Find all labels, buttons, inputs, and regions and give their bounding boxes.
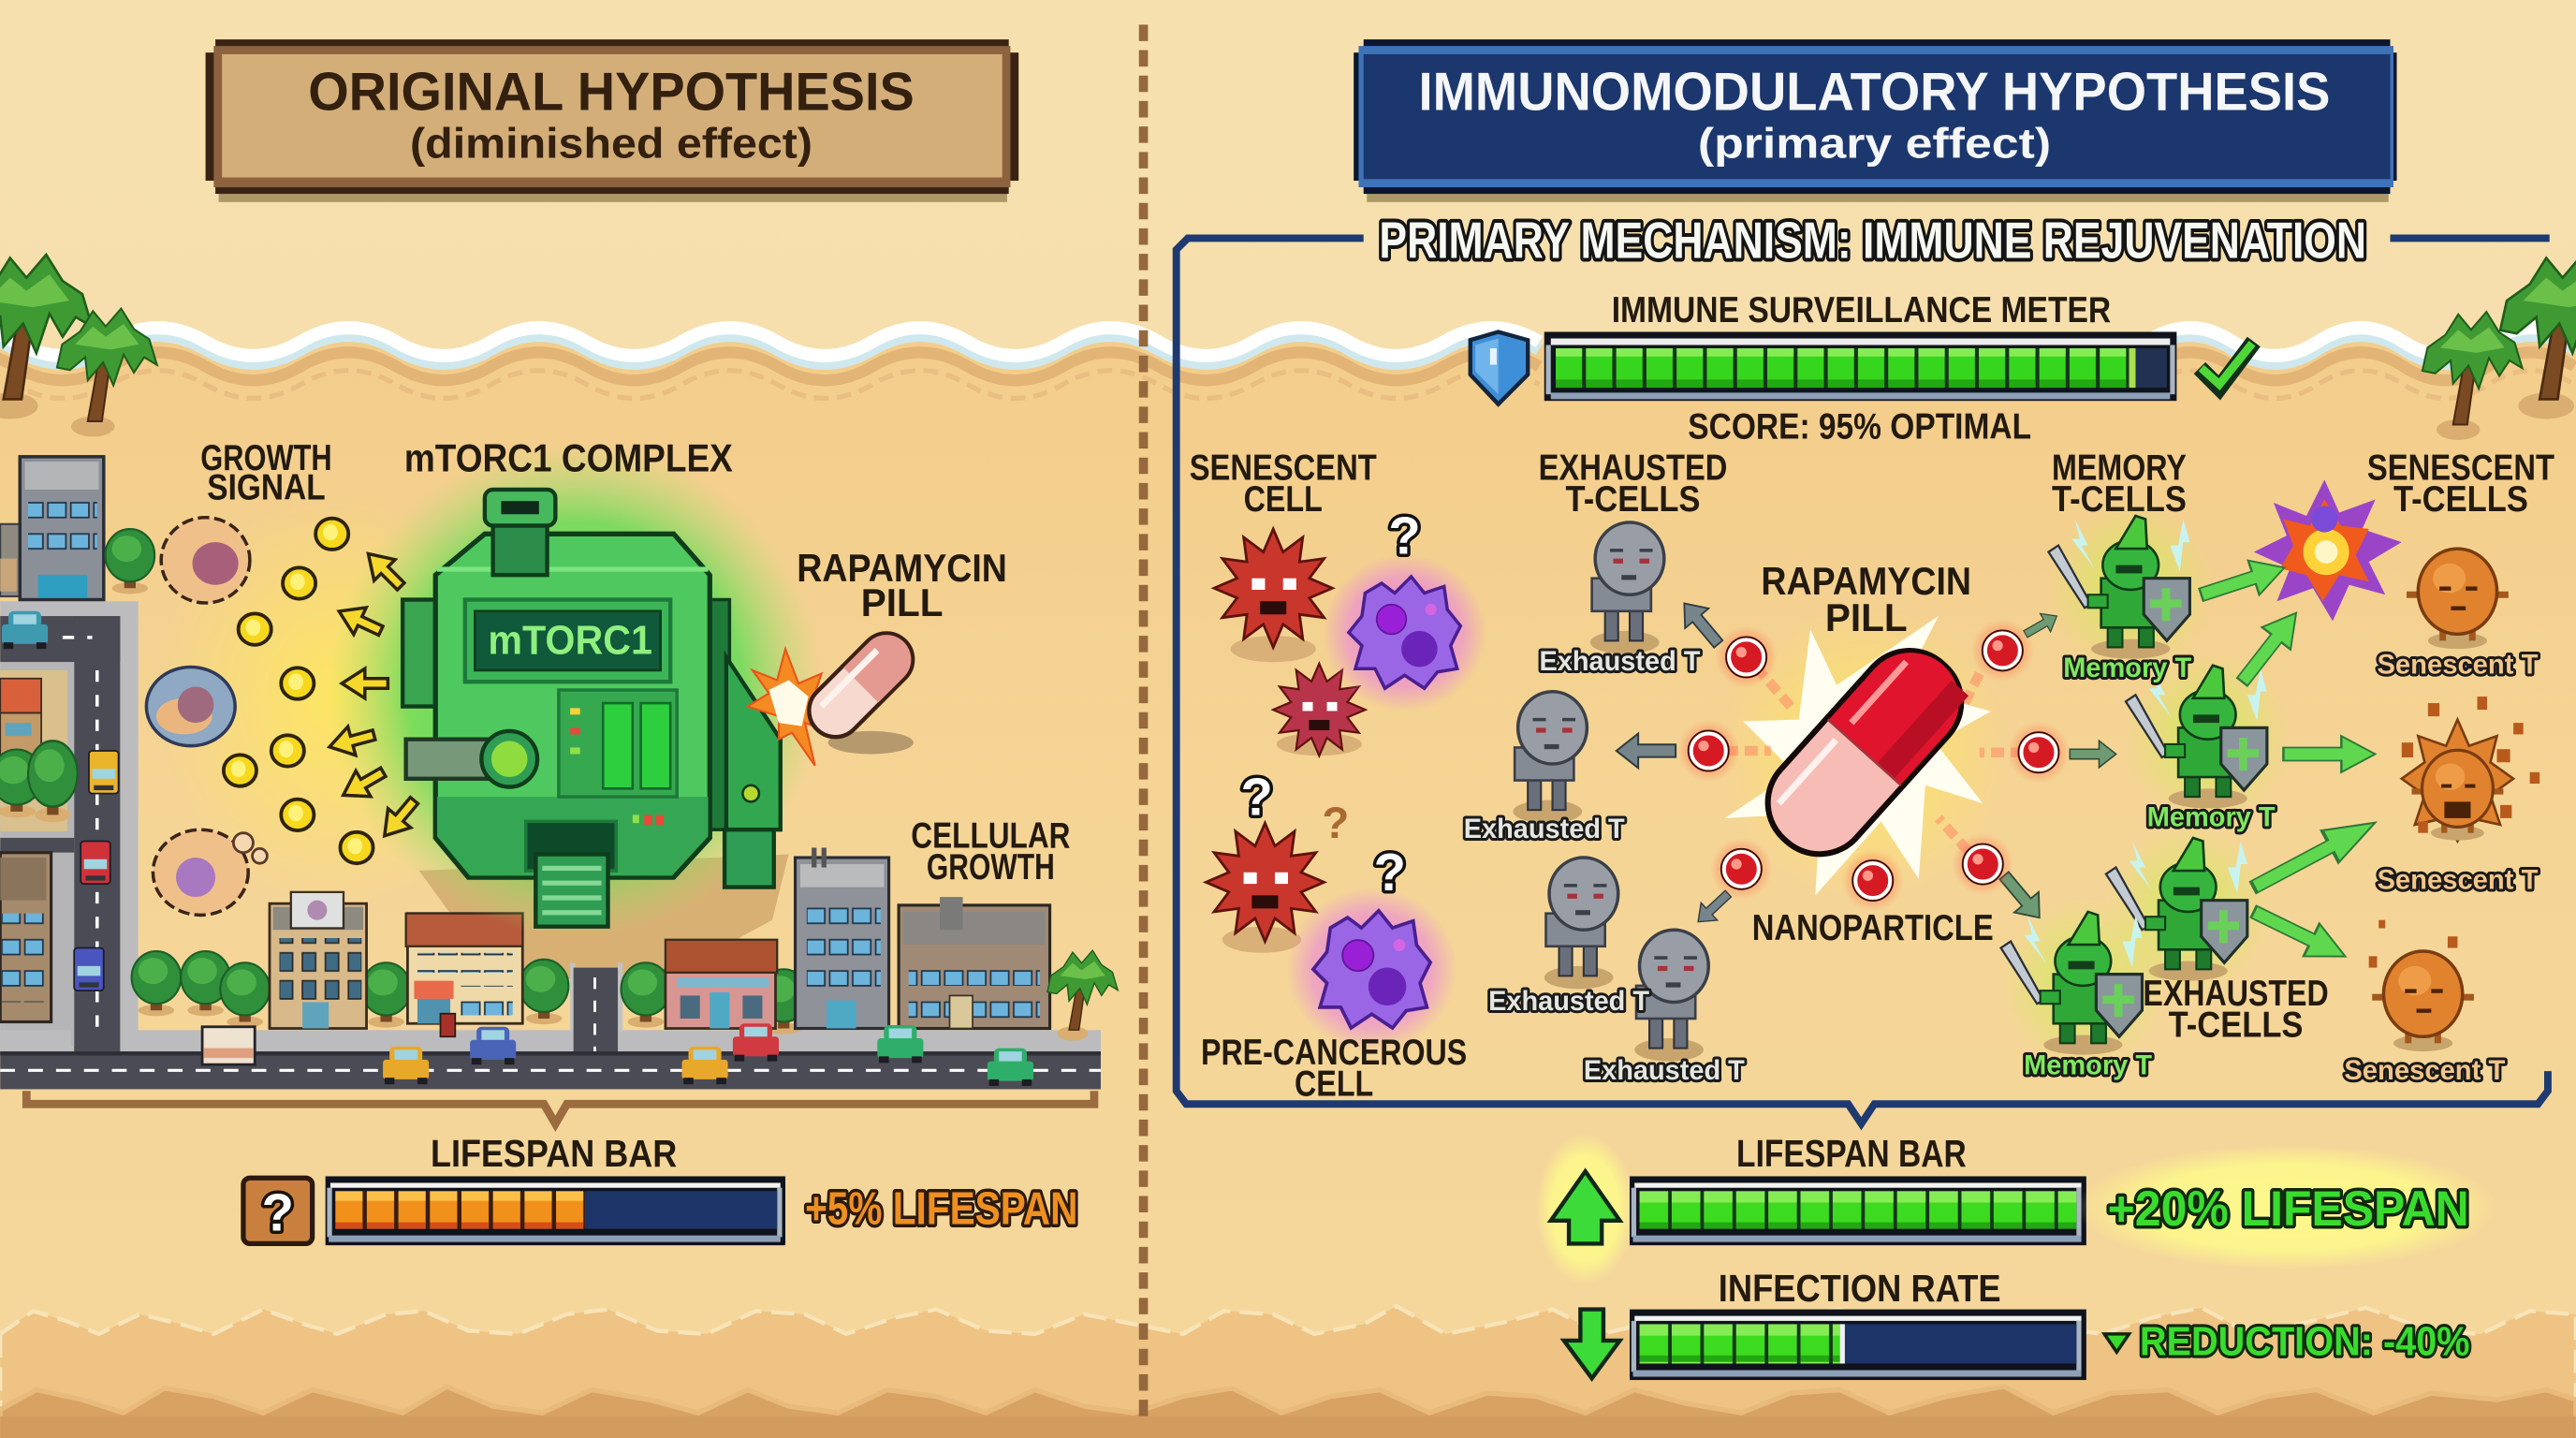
label: senescent t-cells bbox=[2367, 448, 2554, 520]
label: mTORC1 complex: mTORC1 COMPLEX bbox=[404, 436, 733, 480]
label: immune surveillance meter: IMMUNE SURVEILLANCE METER bbox=[1612, 290, 2111, 330]
labels: memory T bbox=[2024, 653, 2276, 1081]
lifespan bar left bbox=[326, 1176, 785, 1245]
mTORC1 ground shadow bbox=[419, 855, 789, 982]
label: score: SCORE: 95% OPTIMAL bbox=[1688, 407, 2031, 448]
labels: senescent T: Senescent T bbox=[2377, 864, 2538, 895]
labels: exhausted T: Exhausted T bbox=[1464, 814, 1625, 844]
panel: original hypothesis title: (diminished effect) bbox=[410, 119, 812, 167]
city streets and sidewalks bbox=[0, 601, 1101, 1089]
immune surveillance meter bar bbox=[1544, 331, 2176, 401]
label: rapamycin pill center: RAPAMYCIN bbox=[1761, 559, 1971, 603]
icon: down arrow bbox=[1564, 1310, 1619, 1378]
central pill burst bbox=[1720, 608, 2009, 897]
labels: exhausted T: Exhausted T bbox=[1539, 646, 1700, 677]
icon: checkmark bbox=[2200, 342, 2254, 388]
label: exhausted t-cells lower: T-CELLS bbox=[2169, 1005, 2303, 1045]
labels: memory T: Memory T bbox=[2024, 1050, 2152, 1081]
label: infection rate: INFECTION RATE bbox=[1719, 1267, 2001, 1310]
cells: senescent cluster bbox=[1214, 506, 1486, 756]
street trees bbox=[106, 529, 809, 1034]
label: growth signal: SIGNAL bbox=[207, 467, 326, 507]
green attack arrows bbox=[2196, 550, 2383, 973]
label: senescent cell bbox=[1190, 448, 1377, 520]
label: exhausted t-cells top: EXHAUSTED bbox=[1539, 448, 1727, 488]
infection rate bar bbox=[1630, 1310, 2086, 1380]
value: +5% lifespan: +5% LIFESPAN bbox=[805, 1183, 1077, 1234]
label: exhausted t-cells top bbox=[1539, 448, 1727, 520]
label: growth signal bbox=[200, 438, 332, 507]
label: rapamycin pill left bbox=[797, 546, 1007, 624]
glow: green mTORC1 aura bbox=[329, 444, 822, 936]
labels: exhausted T: Exhausted T bbox=[1584, 1055, 1745, 1086]
label: nanoparticle: NANOPARTICLE bbox=[1752, 908, 1994, 948]
label: rapamycin pill left: PILL bbox=[861, 580, 943, 624]
label: cellular growth: GROWTH bbox=[927, 847, 1055, 888]
palm trees: right bbox=[2422, 255, 2576, 440]
memory t-cell knights bbox=[2001, 503, 2290, 1069]
panel: immunomodulatory hypothesis title: (primary effect) bbox=[1698, 119, 2051, 167]
label: lifespan bar right: LIFESPAN BAR bbox=[1736, 1132, 1967, 1175]
vehicles bbox=[2, 611, 1033, 1086]
mTORC1 robot complex: mTORC1 bbox=[488, 617, 652, 663]
heading: primary mechanism: PRIMARY MECHANISM: IMMUNE REJUVENATION bbox=[1379, 213, 2366, 270]
labels: senescent T bbox=[2344, 649, 2538, 1086]
labels: senescent T: Senescent T bbox=[2377, 649, 2538, 680]
labels: senescent T: Senescent T bbox=[2344, 1055, 2505, 1086]
exhausted t-cell figures bbox=[1513, 522, 1708, 1062]
icon: blue shield bbox=[1471, 331, 1528, 404]
labels: exhausted T: Exhausted T bbox=[1488, 986, 1649, 1017]
growth signal arrows bbox=[326, 543, 426, 845]
value: +20% lifespan: +20% LIFESPAN bbox=[2108, 1181, 2469, 1237]
labels: memory T: Memory T bbox=[2147, 802, 2276, 833]
label: pre-cancerous cell bbox=[1201, 1033, 1467, 1104]
label: rapamycin pill left: RAPAMYCIN bbox=[797, 546, 1007, 590]
left block buildings bbox=[0, 457, 104, 1022]
panel: original hypothesis title bbox=[206, 39, 1018, 202]
label: senescent cell: SENESCENT bbox=[1190, 448, 1377, 488]
label: lifespan bar left: LIFESPAN BAR bbox=[431, 1132, 677, 1175]
icon: up arrow bbox=[1551, 1171, 1619, 1243]
explosion: destroyed cell bbox=[2254, 479, 2402, 621]
nanoparticles bbox=[1677, 620, 2070, 912]
explosion: pill impact bbox=[748, 649, 828, 766]
panel frame: primary mechanism bbox=[1177, 238, 2550, 1123]
rapamycin pill small bbox=[798, 623, 924, 754]
cells: pre-cancerous cluster: ? bbox=[1322, 799, 1349, 848]
label: pre-cancerous cell: PRE-CANCEROUS bbox=[1201, 1033, 1467, 1073]
cells: pre-cancerous cluster bbox=[1206, 767, 1457, 1051]
label: pre-cancerous cell: CELL bbox=[1295, 1064, 1373, 1104]
nanoparticle trails bbox=[1725, 666, 2024, 851]
bracket under city bbox=[26, 1091, 1094, 1123]
cell: growth cell top bbox=[161, 518, 250, 603]
label: senescent t-cells: T-CELLS bbox=[2393, 479, 2528, 520]
label: growth signal: GROWTH bbox=[200, 438, 332, 478]
label: senescent cell: CELL bbox=[1244, 479, 1323, 520]
cells: pre-cancerous cluster: ? bbox=[1241, 767, 1273, 826]
lifespan bar right bbox=[1630, 1176, 2086, 1245]
growth signal coins bbox=[224, 519, 373, 863]
value: reduction -40%: REDUCTION: -40% bbox=[2140, 1319, 2470, 1365]
buildings row bbox=[270, 847, 1118, 1041]
cell: growth cell dividing bbox=[153, 829, 267, 915]
senescent t-cell targets bbox=[2369, 549, 2539, 1051]
explosion core bbox=[768, 680, 809, 726]
glow: +20% lifespan bbox=[2076, 1145, 2497, 1269]
panel: immunomodulatory hypothesis title: IMMUNOMODULATORY HYPOTHESIS bbox=[1419, 63, 2330, 123]
glow: up arrow bbox=[1536, 1134, 1634, 1284]
label: exhausted t-cells lower bbox=[2143, 974, 2329, 1045]
labels: memory T: Memory T bbox=[2063, 653, 2191, 683]
label: memory t-cells: MEMORY bbox=[2052, 448, 2187, 488]
red pill large bbox=[1748, 630, 1982, 874]
label: exhausted t-cells lower: EXHAUSTED bbox=[2143, 974, 2329, 1014]
label: memory t-cells bbox=[2052, 448, 2187, 520]
center dashed divider bbox=[1141, 24, 1146, 1416]
icon: question block bbox=[243, 1178, 313, 1243]
label: cellular growth: CELLULAR bbox=[911, 815, 1071, 856]
panel: immunomodulatory hypothesis title bbox=[1354, 39, 2397, 202]
gray and green direction arrows bbox=[1617, 594, 2116, 931]
labels: exhausted T bbox=[1464, 646, 1745, 1086]
label: exhausted t-cells top: T-CELLS bbox=[1566, 479, 1700, 520]
panel: original hypothesis title: ORIGINAL HYPOTHESIS bbox=[308, 63, 915, 123]
label: rapamycin pill center: PILL bbox=[1825, 595, 1908, 639]
cell: growth cell middle bbox=[146, 667, 235, 746]
cells: pre-cancerous cluster: ? bbox=[1374, 843, 1406, 902]
glow: yellow growth signal bbox=[156, 492, 518, 903]
label: rapamycin pill center bbox=[1761, 559, 1971, 639]
label: memory t-cells: T-CELLS bbox=[2052, 479, 2187, 520]
palm trees: left bbox=[0, 255, 157, 436]
label: cellular growth bbox=[911, 815, 1071, 888]
mTORC1 robot complex bbox=[402, 490, 781, 927]
icon: reduction triangle bbox=[2104, 1334, 2129, 1352]
cells: senescent cluster: ? bbox=[1388, 506, 1421, 565]
icon: question block: ? bbox=[262, 1182, 294, 1241]
